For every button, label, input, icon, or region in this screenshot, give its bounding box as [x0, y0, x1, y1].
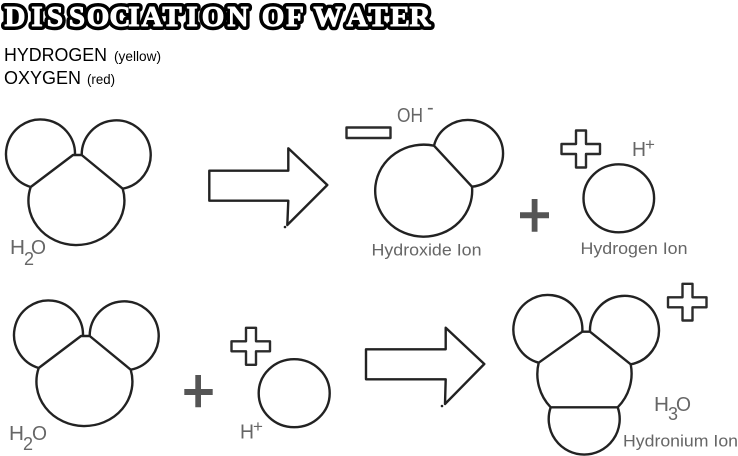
- molecule: hydroxide ion: -: [427, 97, 434, 119]
- title: DISSOCIATIONOFWATER: [5, 1, 432, 33]
- plus sign: top: [520, 199, 549, 232]
- molecule: hydronium ion: H: [654, 394, 669, 416]
- positive charge symbol: hydronium ion: [668, 284, 706, 320]
- molecule: hydroxide ion: OH: [397, 105, 423, 127]
- molecule: hydroxide ion: [375, 97, 503, 237]
- molecule: water, top: 2: [24, 249, 34, 269]
- molecule: water, top: [6, 119, 151, 269]
- hydrogen ion: top: +: [645, 135, 655, 154]
- label: hydrogen ion: Hydrogen Ion: [580, 239, 688, 258]
- molecule: water, top: H: [10, 237, 25, 259]
- hydrogen ion: bottom: [240, 359, 330, 444]
- hydrogen ion: top: [584, 135, 655, 232]
- negative charge symbol: [346, 128, 390, 138]
- arrow: bottom reaction: [366, 328, 484, 407]
- legend: OXYGEN: [4, 68, 81, 88]
- legend: HYDROGEN: [4, 45, 107, 65]
- molecule: hydronium ion: O: [676, 394, 691, 416]
- legend: (red): [87, 71, 115, 87]
- molecule: water, bottom: O: [32, 423, 47, 445]
- molecule: water, bottom: H: [9, 423, 24, 445]
- molecule: water, top: O: [31, 237, 46, 259]
- legend: [4, 45, 161, 88]
- hydrogen ion: top: H: [632, 139, 646, 161]
- molecule: water, bottom: 2: [23, 434, 33, 454]
- legend: (yellow): [114, 48, 161, 64]
- molecule: hydronium ion: 3: [668, 404, 678, 424]
- arrow: top reaction: [209, 148, 327, 228]
- molecule: water, bottom: [9, 300, 159, 454]
- plus sign: bottom: [184, 375, 213, 407]
- positive charge symbol: hydrogen ion top: [562, 130, 600, 168]
- label: hydroxide ion: Hydroxide Ion: [372, 240, 482, 260]
- molecule: hydronium ion: [513, 295, 691, 455]
- label: hydronium ion: Hydronium Ion: [623, 432, 738, 451]
- positive charge symbol: hydrogen ion bottom: [232, 328, 270, 365]
- hydrogen ion: bottom: +: [253, 417, 263, 436]
- title: DISSOCIATIONOFWATER: [5, 1, 432, 33]
- hydrogen ion: bottom: H: [240, 422, 254, 444]
